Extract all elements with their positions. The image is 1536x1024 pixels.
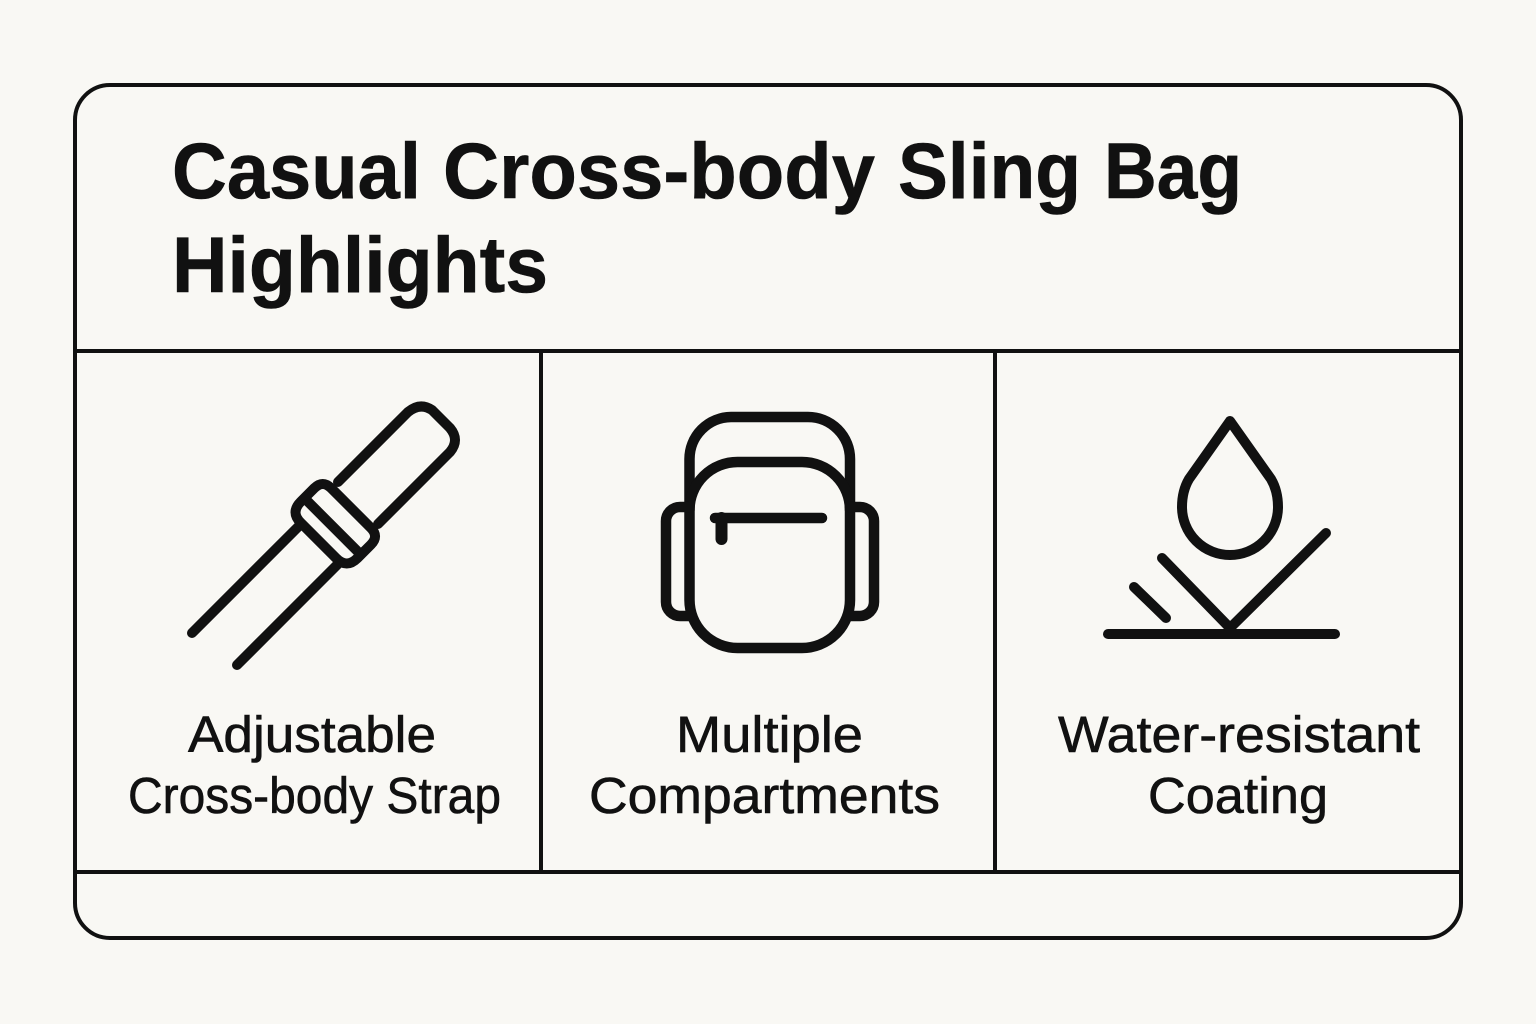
label: adjustable cross-body strap: Cross-body Strap <box>128 767 501 824</box>
title: Bag <box>1104 126 1242 215</box>
title: Sling <box>898 126 1081 215</box>
label: multiple compartments: Multiple <box>676 706 863 763</box>
label: water-resistant coating: Water-resistant <box>1058 706 1420 763</box>
icon: strap with buckle <box>192 406 455 665</box>
label: adjustable cross-body strap <box>128 706 501 824</box>
label: water-resistant coating <box>1058 706 1420 824</box>
label: multiple compartments <box>589 706 940 824</box>
panel: multiple compartments <box>589 417 940 824</box>
panel: adjustable strap <box>128 406 501 824</box>
title: Cross-body <box>443 126 875 215</box>
label: adjustable cross-body strap: Adjustable <box>188 706 436 763</box>
icon: backpack <box>666 417 874 648</box>
title: Highlights <box>172 220 548 309</box>
panel: outer card frame <box>75 85 1461 938</box>
icon: water drop on surface <box>1108 421 1335 634</box>
title <box>172 126 1242 309</box>
label: water-resistant coating: Coating <box>1148 767 1328 824</box>
title: Casual <box>172 126 421 215</box>
panel: water-resistant coating <box>1058 421 1420 824</box>
label: multiple compartments: Compartments <box>589 767 940 824</box>
